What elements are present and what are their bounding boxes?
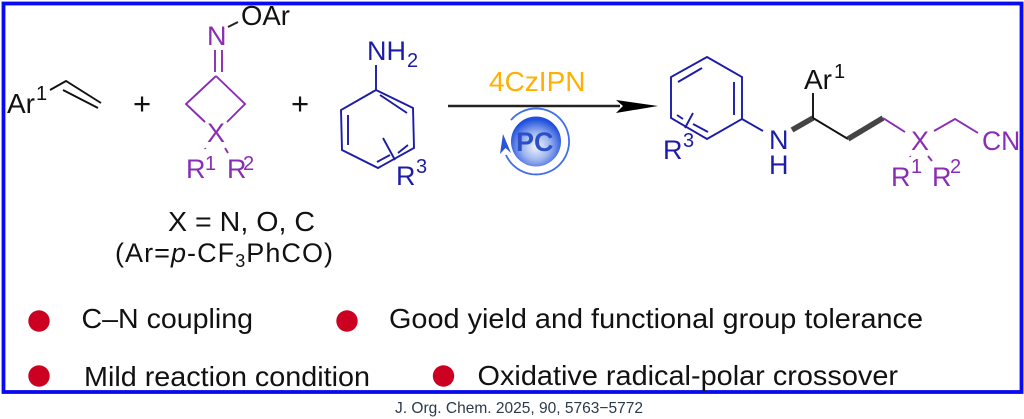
reagent: oxime ester four-membered ring: 1 bbox=[205, 153, 216, 175]
feature: mild conditions: Mild reaction condition bbox=[84, 361, 370, 392]
reagent: oxime ester four-membered ring: X bbox=[207, 118, 225, 148]
reagent: oxime ester four-membered ring: 2 bbox=[243, 153, 254, 175]
citation: J. Org. Chem. 2025, 90, 5763−5772 bbox=[395, 400, 643, 417]
plus sign 2: + bbox=[291, 86, 309, 121]
product: X-containing nitrile fragment: R bbox=[932, 162, 952, 192]
product: X-containing nitrile fragment: R bbox=[891, 162, 910, 192]
product: X-containing nitrile fragment: 2 bbox=[950, 156, 961, 178]
reagent: aryl alkene: 1 bbox=[36, 83, 47, 105]
text: Ar definition: (Ar=p-CF bbox=[115, 238, 234, 268]
icon: photocatalyst PC cycle bbox=[500, 108, 569, 174]
product: aryl ring fragment: N bbox=[769, 125, 788, 155]
feature: good yield: Good yield and functional group tolerance bbox=[389, 303, 923, 334]
label: 4CzIPN catalyst: 4CzIPN bbox=[489, 66, 585, 97]
reagent: aniline: 3 bbox=[416, 156, 427, 178]
icon: photocatalyst PC cycle: PC bbox=[516, 127, 554, 157]
product: carbon chain with Ar1: Ar bbox=[804, 64, 832, 95]
product: X-containing nitrile fragment: 1 bbox=[911, 156, 922, 178]
reagent: oxime ester four-membered ring: N bbox=[207, 21, 226, 51]
reagent: aniline: R bbox=[396, 161, 416, 191]
product: carbon chain with Ar1 bbox=[792, 61, 883, 139]
text: Ar definition: PhCO) bbox=[246, 238, 333, 268]
reagent: oxime ester four-membered ring: R bbox=[186, 154, 206, 184]
product: X-containing nitrile fragment: X bbox=[911, 126, 929, 156]
product: aryl ring fragment: 3 bbox=[683, 130, 694, 152]
reagent: aryl alkene: Ar bbox=[7, 88, 35, 119]
feature: radical-polar crossover: Oxidative radical-polar crossover bbox=[478, 360, 898, 391]
reagent: oxime ester four-membered ring bbox=[186, 0, 290, 184]
plus sign 1: + bbox=[133, 86, 151, 121]
reagent: aniline: NH bbox=[367, 36, 406, 66]
product: X-containing nitrile fragment bbox=[883, 118, 1020, 192]
product: X-containing nitrile fragment: CN bbox=[982, 126, 1020, 156]
reagent: aniline bbox=[341, 36, 427, 191]
product: aryl ring fragment: R bbox=[663, 135, 682, 165]
product: aryl ring fragment: H bbox=[769, 150, 788, 180]
text: Ar definition: 3 bbox=[235, 251, 245, 271]
reagent: aniline: 2 bbox=[407, 50, 418, 72]
reagent: oxime ester four-membered ring: R bbox=[227, 154, 246, 184]
reagent: aryl alkene bbox=[7, 81, 101, 119]
feature: C-N coupling: C–N coupling bbox=[82, 303, 253, 334]
reaction arrow bbox=[448, 100, 658, 113]
product: aryl ring fragment bbox=[663, 57, 788, 180]
product: carbon chain with Ar1: 1 bbox=[834, 61, 845, 83]
text: X definition: X = N, O, C bbox=[168, 206, 315, 237]
reagent: oxime ester four-membered ring: OAr bbox=[241, 0, 290, 31]
